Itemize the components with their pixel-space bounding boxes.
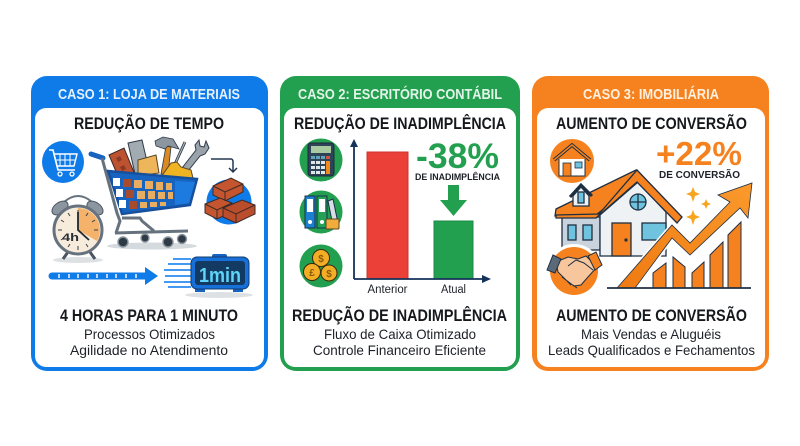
icon: 1min timer xyxy=(164,254,253,298)
text: mais vendas: Mais Vendas e Aluguéis xyxy=(581,326,721,342)
hammer xyxy=(161,146,171,174)
title: redução de tempo: REDUÇÃO DE TEMPO xyxy=(74,113,224,133)
icon: coins xyxy=(300,244,342,288)
heading: caso 2: CASO 2: ESCRITÓRIO CONTÁBIL xyxy=(298,85,502,103)
icon: house badge xyxy=(550,139,594,183)
heading: caso 1: CASO 1: LOJA DE MATERIAIS xyxy=(58,86,240,103)
text: leads qualificados: Leads Qualificados e Fechamentos xyxy=(548,342,755,358)
basket xyxy=(108,171,197,214)
icon: coins: $ xyxy=(318,254,324,265)
panel: caso 2 xyxy=(280,76,520,371)
chart: growth bars and arrow xyxy=(607,183,752,288)
wheels xyxy=(118,234,186,247)
icon: shopping cart badge xyxy=(42,141,84,183)
icon: coins: $ xyxy=(326,269,332,280)
icon: calculator xyxy=(300,138,342,182)
box xyxy=(138,155,159,176)
heading: caso 3: CASO 3: IMOBILIÁRIA xyxy=(583,86,719,103)
bag xyxy=(161,162,193,178)
text: redução de inadimplência: REDUÇÃO DE INADIMPLÊNCIA xyxy=(292,305,507,325)
text: processos otimizados: Processos Otimizados xyxy=(84,326,215,342)
icon: bricks xyxy=(205,178,255,224)
steel xyxy=(128,140,149,174)
icon: handshake xyxy=(547,244,602,298)
illustration: house xyxy=(555,170,682,256)
arrow: decrease xyxy=(440,185,467,216)
icon: coins: £ xyxy=(309,268,315,279)
icon: cart with materials xyxy=(91,137,209,250)
icon: sparkles xyxy=(686,187,711,225)
text: fluxo de caixa: Fluxo de Caixa Otimizado xyxy=(324,326,476,342)
text: agilidade no atendimento: Agilidade no Atendimento xyxy=(70,342,228,358)
callout: +22%: +22% xyxy=(656,135,742,172)
panel: caso 1 xyxy=(31,76,268,371)
icon: 1min timer: 1min xyxy=(199,265,241,287)
icon: alarm clock 4h: 4h xyxy=(62,232,79,244)
callout label: de inadimplência: DE INADIMPLÊNCIA xyxy=(415,171,500,183)
label: atual: Atual xyxy=(441,284,466,296)
panel: caso 3 xyxy=(532,76,769,371)
wrench xyxy=(182,140,209,171)
icon: binders xyxy=(300,190,342,234)
text: aumento de conversão: AUMENTO DE CONVERSÃO xyxy=(556,305,747,325)
chart: bars before and after xyxy=(350,139,491,296)
brick xyxy=(109,148,138,188)
arrow: to bricks xyxy=(211,159,237,172)
title: redução de inadimplência: REDUÇÃO DE INADIMPLÊNCIA xyxy=(294,113,506,133)
label: anterior: Anterior xyxy=(368,284,408,296)
callout label: de conversão: DE CONVERSÃO xyxy=(659,168,740,181)
title: aumento de conversão: AUMENTO DE CONVERSÃO xyxy=(556,113,747,133)
callout: -38%: -38% xyxy=(416,137,499,176)
arrow: time progress xyxy=(52,267,158,285)
screwdriver xyxy=(175,142,185,164)
text: 4 horas para 1 minuto: 4 HORAS PARA 1 MINUTO xyxy=(60,307,238,325)
text: controle financeiro: Controle Financeiro Eficiente xyxy=(313,342,486,358)
icon: alarm clock 4h xyxy=(49,196,106,263)
handle and frame xyxy=(91,154,103,158)
